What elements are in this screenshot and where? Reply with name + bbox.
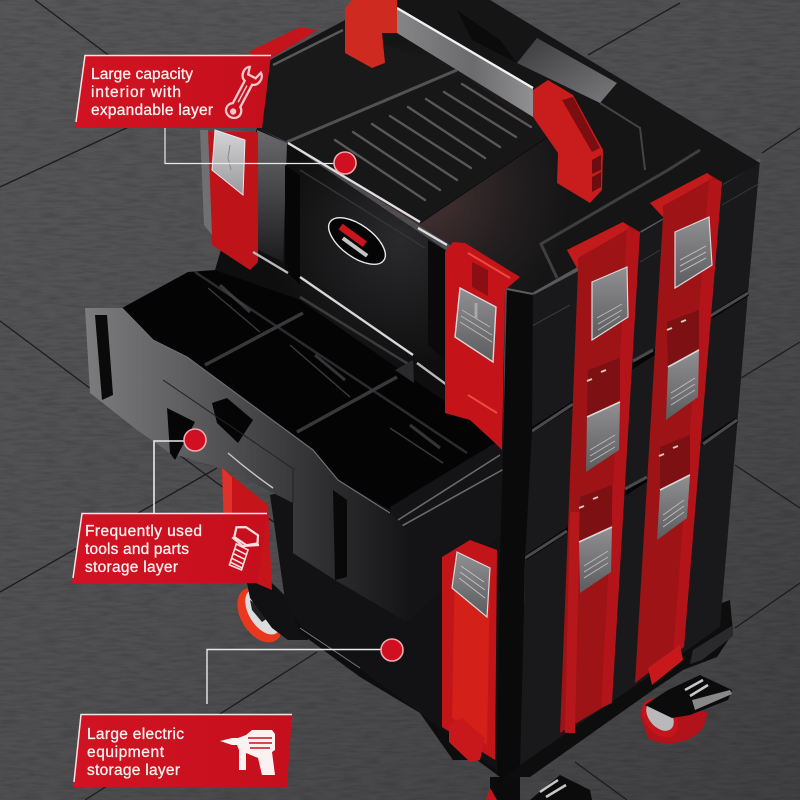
marker dot 1 [334, 152, 356, 174]
callout text: storage layer [87, 762, 180, 779]
callout 2 leader [154, 429, 206, 513]
callout text: Large capacity [91, 66, 193, 83]
base plate and wheels [228, 560, 733, 800]
handle bar [397, 8, 533, 117]
callout: large electric [73, 714, 292, 787]
icon: bolt [223, 524, 263, 573]
latch 1 top [592, 267, 628, 340]
panel line [420, 137, 547, 223]
callout text: expandable layer [91, 102, 213, 119]
corner column [497, 288, 533, 778]
panel: top surface of case [248, 0, 760, 293]
right red support [533, 80, 603, 203]
panel: right face of case [520, 160, 760, 765]
right caster wheel [634, 675, 732, 744]
recessed pillar [285, 165, 300, 285]
panel: upper layer left face [215, 128, 505, 450]
callout text: equipment [87, 744, 165, 761]
callout text: storage layer [85, 559, 178, 576]
rim around right lid [541, 150, 700, 278]
grip slot [228, 453, 273, 488]
icon: wrench [222, 65, 264, 122]
hooks strip 1 [579, 358, 620, 542]
left red support [345, 0, 397, 68]
red rear clip [248, 27, 317, 57]
drawer right side [390, 440, 520, 622]
strip foot [648, 645, 683, 685]
base plate [285, 560, 733, 777]
ribs [335, 84, 531, 200]
callout: large capacity [75, 55, 271, 128]
callout text: Large electric [87, 726, 184, 743]
latch [452, 552, 490, 617]
base highlight line [300, 628, 360, 668]
callout: frequently used [72, 513, 267, 583]
top highlight [288, 143, 447, 245]
red strip with latch, middle left [445, 242, 520, 450]
callout 1 leader [165, 128, 356, 174]
latch 2 lower [657, 475, 690, 540]
top edge highlight [533, 160, 760, 293]
rear gray recess [517, 38, 617, 103]
callout text: interior with [91, 84, 181, 101]
callout text: tools and parts [85, 541, 189, 558]
rear compartment [257, 30, 457, 142]
left rear edge [273, 30, 343, 65]
handle [345, 0, 603, 203]
left caster bracket [247, 583, 308, 640]
red side strip with latch, upper left [200, 130, 258, 270]
drawer front panel [85, 308, 407, 622]
marker dot 3 [381, 639, 403, 661]
hooks strip 2 [659, 310, 699, 490]
brand badge [321, 209, 393, 273]
long divider [195, 272, 467, 453]
marker dot 2 [184, 429, 206, 451]
open drawer [85, 252, 520, 622]
callout text: Frequently used [85, 523, 202, 540]
drawer interior [122, 252, 500, 510]
red strip with latch, lower left [442, 540, 497, 762]
cross dividers [205, 313, 397, 432]
latch [455, 288, 496, 362]
latch 2 middle [666, 350, 699, 420]
ribbed lid [287, 70, 547, 223]
latch 1 middle [586, 402, 620, 472]
icon: drill [220, 730, 275, 775]
red strip under drawer [222, 468, 272, 590]
panel: lower layer left face [222, 440, 505, 775]
left caster wheel [228, 579, 292, 651]
latch 1 lower [579, 527, 612, 593]
grip notch [212, 398, 253, 443]
latch 2 top [675, 217, 712, 288]
callout 3 leader [207, 639, 403, 704]
red strip 2, right face [635, 173, 722, 685]
layer seams [525, 183, 760, 558]
gray side panel [257, 130, 287, 262]
red strip 1, right face [560, 222, 640, 733]
latch [212, 130, 245, 195]
rear rail [300, 277, 413, 355]
front caster pedal [486, 775, 592, 800]
